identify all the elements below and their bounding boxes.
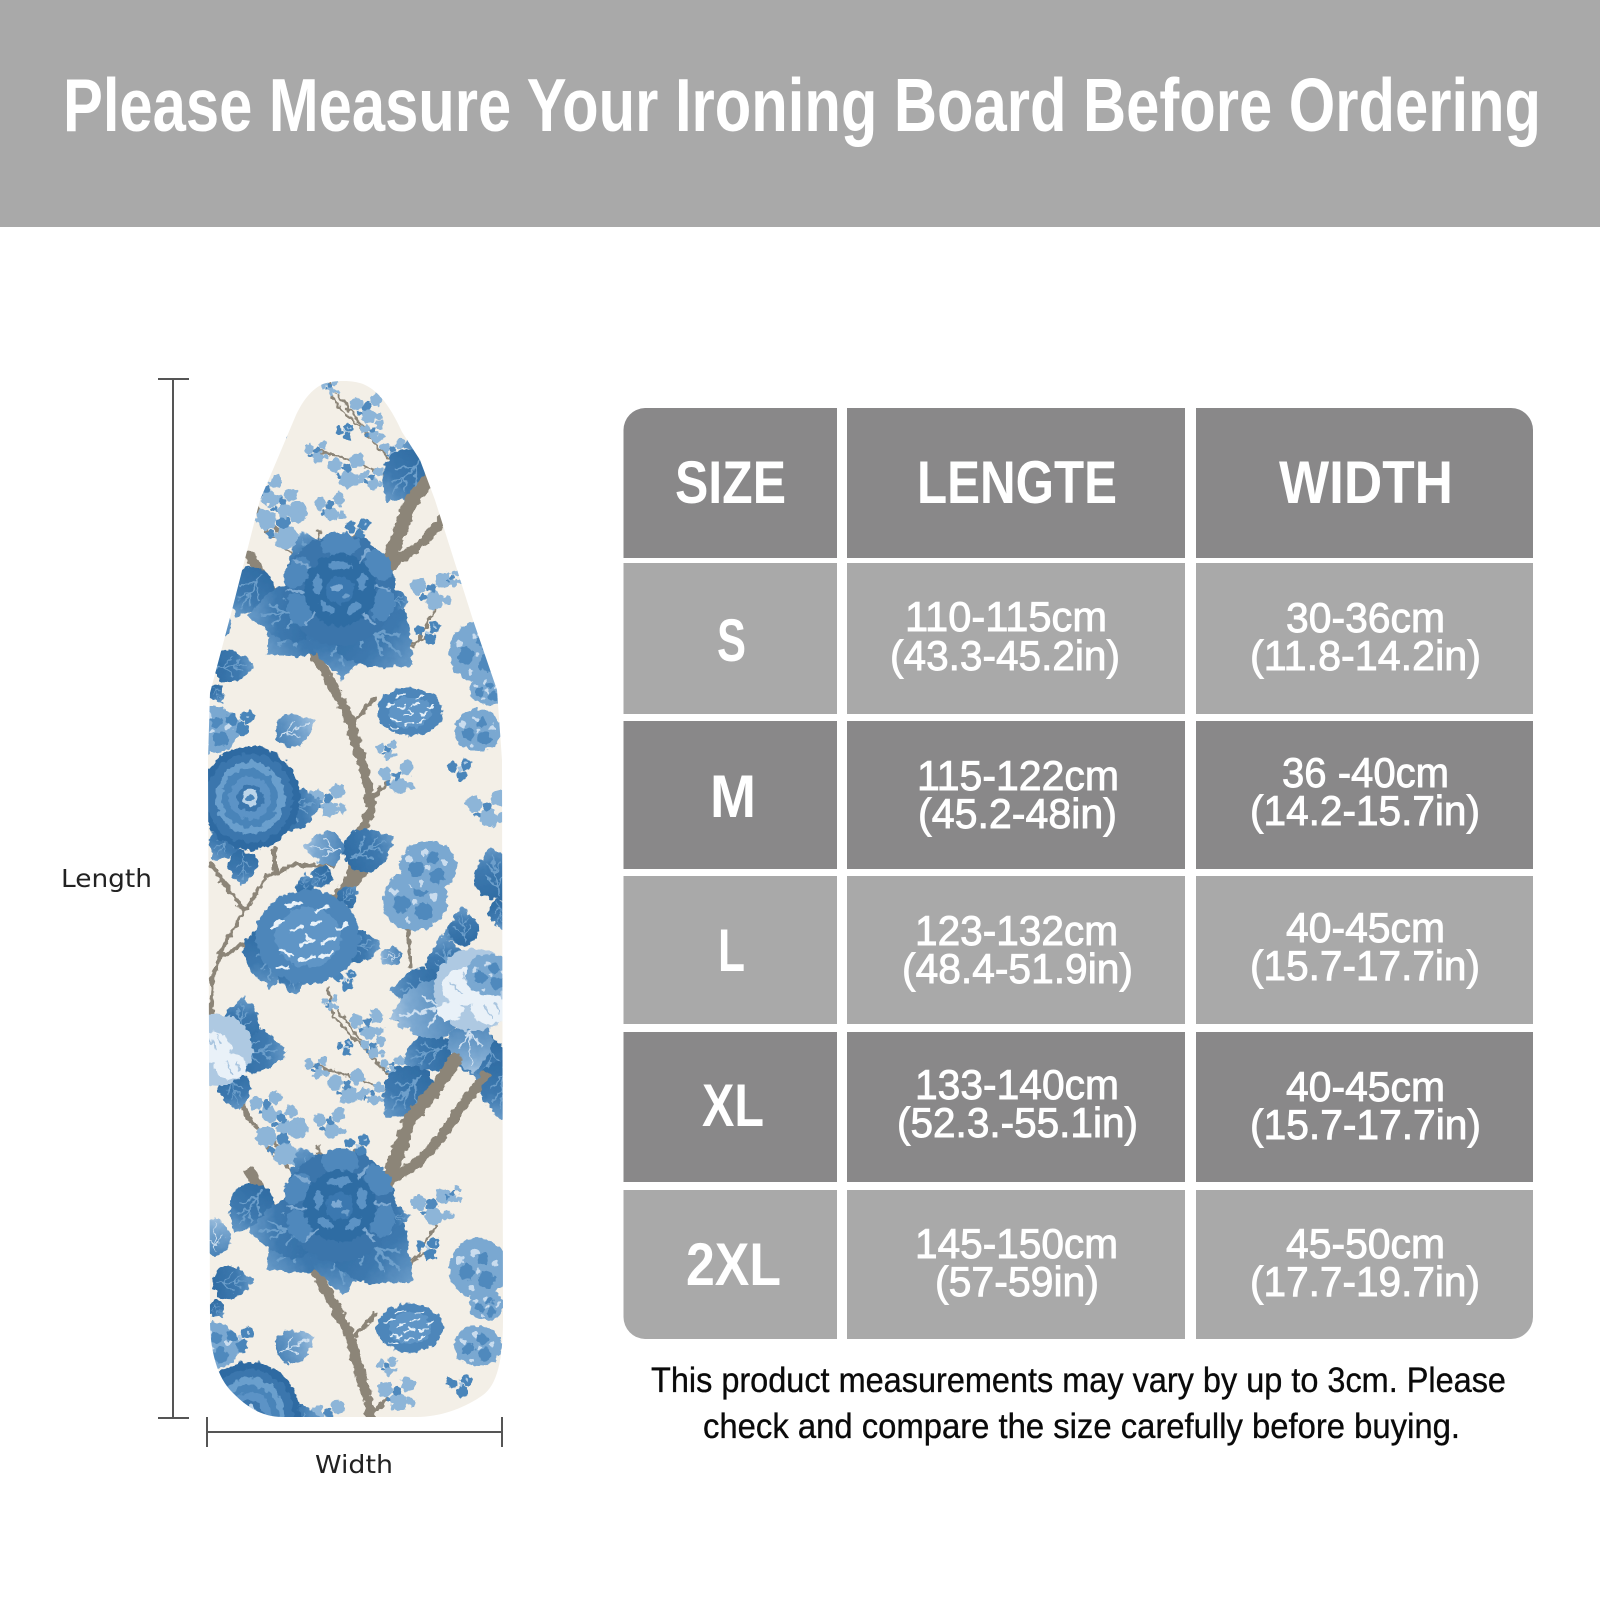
row XL: XL [702,1072,764,1139]
row L: (48.4-51.9in) [902,945,1133,992]
row 2XL: (17.7-19.7in) [1250,1258,1480,1305]
row M: 36 -40cm [1282,749,1449,796]
title banner [0,0,1600,227]
row M: (14.2-15.7in) [1250,787,1480,834]
width dimension line [207,1417,502,1479]
length dimension line [61,379,189,1418]
width label: Width [315,1450,393,1479]
row XL: 133-140cm [915,1061,1119,1108]
row XL: (15.7-17.7in) [1250,1101,1481,1148]
header row: SIZE [675,449,786,516]
row M: M [710,763,756,830]
row XL: 40-45cm [1286,1063,1445,1110]
header row: WIDTH [1279,449,1453,516]
ironing board cover with floral print [208,381,503,1417]
row S: S [717,607,746,674]
footnote [651,1361,1506,1446]
row M: (45.2-48in) [918,790,1117,837]
row L: 40-45cm [1286,904,1445,951]
row L [624,876,1533,1024]
row XL: (52.3.-55.1in) [897,1099,1138,1146]
row 2XL [624,1190,1533,1339]
row L: L [718,917,745,984]
row 2XL: 45-50cm [1286,1220,1445,1267]
row S [624,563,1533,714]
row XL [624,1032,1533,1182]
size table [624,408,1533,1339]
header row [624,408,1533,558]
row 2XL: (57-59in) [935,1258,1099,1305]
row 2XL: 2XL [686,1231,781,1298]
row S: 30-36cm [1286,594,1445,641]
row S: (11.8-14.2in) [1250,632,1481,679]
row M [624,721,1533,869]
footnote: This product measurements may vary by up to 3cm. Please [651,1361,1506,1400]
row S: (43.3-45.2in) [890,632,1120,679]
row L: 123-132cm [915,907,1118,954]
row M: 115-122cm [917,752,1119,799]
length label: Length [61,864,152,893]
row S: 110-115cm [905,593,1107,640]
header row: LENGTE [917,449,1117,516]
row L: (15.7-17.7in) [1250,942,1480,989]
footnote: check and compare the size carefully before buying. [703,1407,1460,1446]
row 2XL: 145-150cm [915,1220,1118,1267]
